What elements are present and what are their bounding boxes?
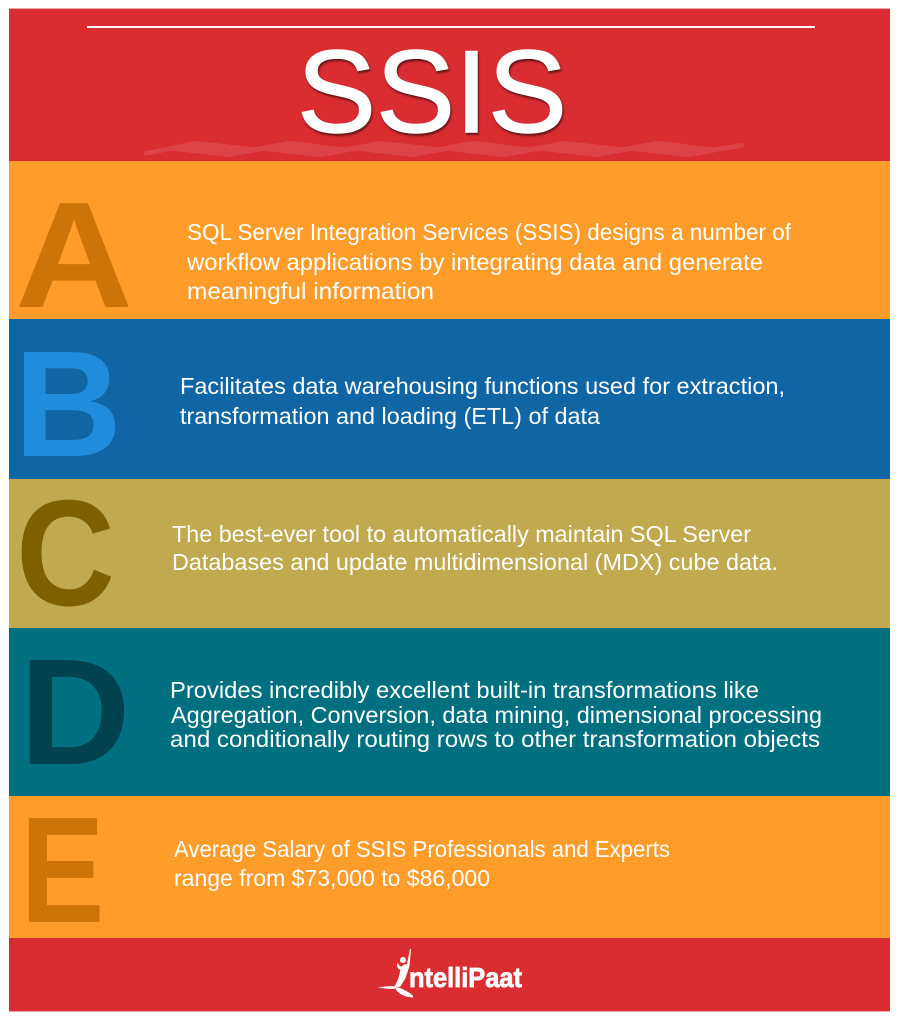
logo wordmark: ntelliPaat <box>409 962 522 993</box>
text block E: range from $73,000 to $86,000 <box>174 865 490 891</box>
letter B: B <box>14 319 122 488</box>
text block A: SQL Server Integration Services (SSIS) designs a number of <box>187 219 792 245</box>
letter D: D <box>20 627 130 796</box>
text block C: The best-ever tool to automatically maintain SQL Server <box>172 521 751 547</box>
panel: header <box>9 9 890 161</box>
text block C <box>172 521 778 575</box>
letter C: C <box>16 468 115 637</box>
text block D: and conditionally routing rows to other transformation objects <box>170 726 820 752</box>
text block E: Average Salary of SSIS Professionals and Experts <box>174 836 670 862</box>
text block A: meaningful information <box>187 278 434 304</box>
logo: IntelliPaat <box>378 949 522 998</box>
panel: B <box>9 319 890 488</box>
decorative wave under title <box>145 142 743 156</box>
text block D: Aggregation, Conversion, data mining, dimensional processing <box>171 702 822 728</box>
text block A <box>186 219 792 304</box>
text block B: transformation and loading (ETL) of data <box>180 403 600 429</box>
letter E: E <box>20 785 104 954</box>
letter A: A <box>15 170 133 339</box>
panel: A <box>9 161 890 339</box>
panel: footer <box>9 938 890 1012</box>
text block C: Databases and update multidimensional (MDX) cube data. <box>172 549 778 575</box>
icon: leaping figure <box>378 949 413 998</box>
panel: D <box>9 627 890 796</box>
text block E <box>174 836 670 891</box>
text block B <box>180 373 785 429</box>
panel: C <box>9 468 890 637</box>
panel: E <box>9 785 890 954</box>
text block D: Provides incredibly excellent built-in transformations like <box>170 677 759 703</box>
title: SSIS <box>297 26 567 157</box>
text block B: Facilitates data warehousing functions used for extraction, <box>180 373 785 399</box>
text block D <box>170 677 822 752</box>
text block A: workflow applications by integrating data and generate <box>186 249 763 275</box>
